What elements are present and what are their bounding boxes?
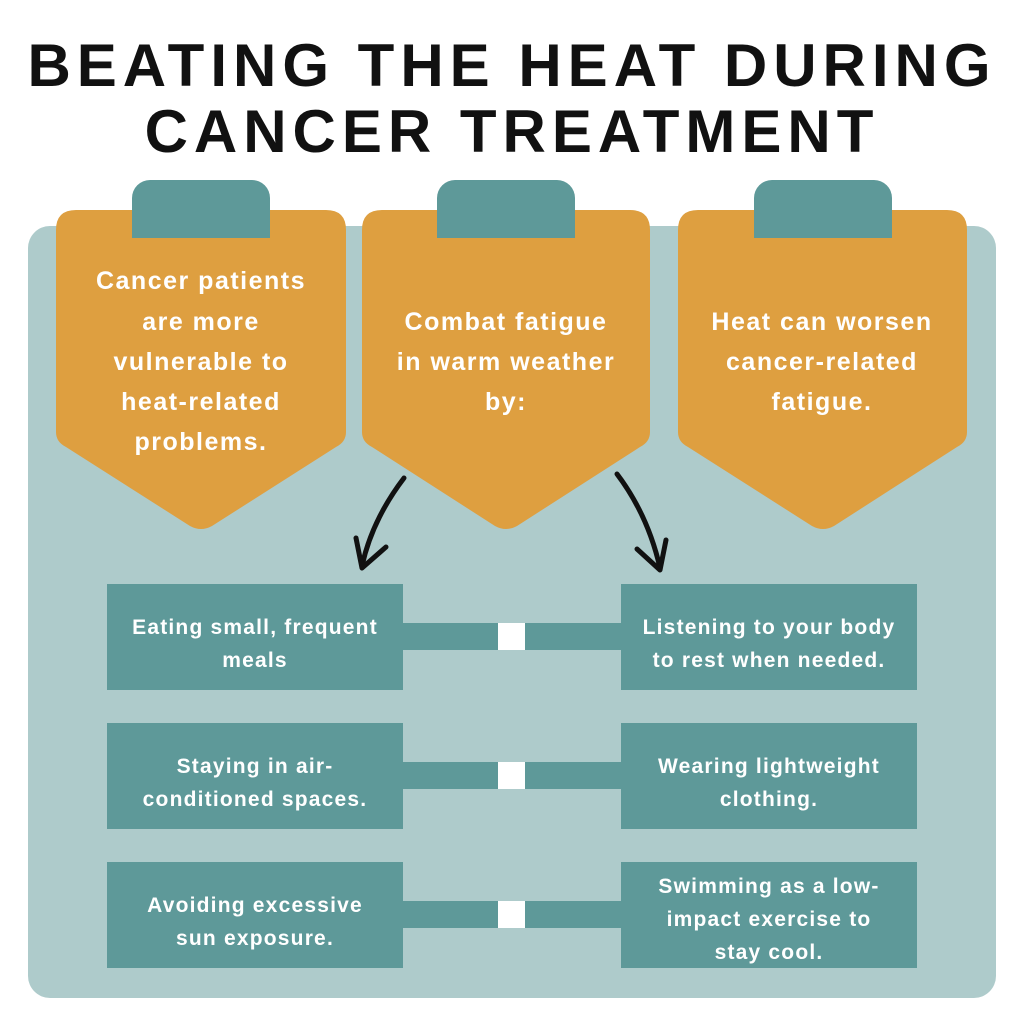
card: vulnerable: heat-related <box>121 388 281 416</box>
card: vulnerable: vulnerable to <box>113 348 289 376</box>
tips boxes: Staying in air- <box>177 755 333 778</box>
arrow: right <box>617 474 666 570</box>
tips boxes: conditioned spaces. <box>143 788 367 811</box>
tips boxes: impact exercise to <box>667 908 871 931</box>
card: heat worsens: cancer-related <box>726 348 918 376</box>
card: heat worsens: fatigue. <box>772 388 872 416</box>
card: combat fatigue: by: <box>485 388 527 416</box>
card: combat fatigue: in warm weather <box>397 348 615 376</box>
tips boxes: stay cool. <box>715 941 823 964</box>
card: vulnerable: are more <box>142 308 260 336</box>
tips boxes: to rest when needed. <box>653 649 885 672</box>
card: heat worsens: Heat can worsen <box>711 308 933 336</box>
card: combat fatigue: Combat fatigue <box>405 308 607 336</box>
tips boxes: clothing. <box>720 788 818 811</box>
tips boxes: Wearing lightweight <box>658 755 880 778</box>
tips boxes: meals <box>222 649 288 672</box>
tips boxes: Avoiding excessive <box>147 894 363 917</box>
tips boxes: sun exposure. <box>176 927 334 950</box>
tips boxes: Listening to your body <box>643 616 895 639</box>
card: combat fatigue <box>362 180 650 529</box>
card: vulnerable: problems. <box>135 428 267 456</box>
arrow: left <box>356 478 404 568</box>
title <box>27 32 997 165</box>
connectors <box>400 623 624 928</box>
tips boxes: Eating small, frequent <box>132 616 378 639</box>
card: vulnerable <box>56 180 346 529</box>
panel: background <box>28 226 996 998</box>
title: CANCER TREATMENT <box>145 98 879 165</box>
card: vulnerable: Cancer patients <box>96 267 306 295</box>
card: heat worsens <box>678 180 967 529</box>
title: BEATING THE HEAT DURING <box>27 32 997 99</box>
tips boxes: Swimming as a low- <box>658 875 880 898</box>
tips boxes <box>107 584 917 968</box>
